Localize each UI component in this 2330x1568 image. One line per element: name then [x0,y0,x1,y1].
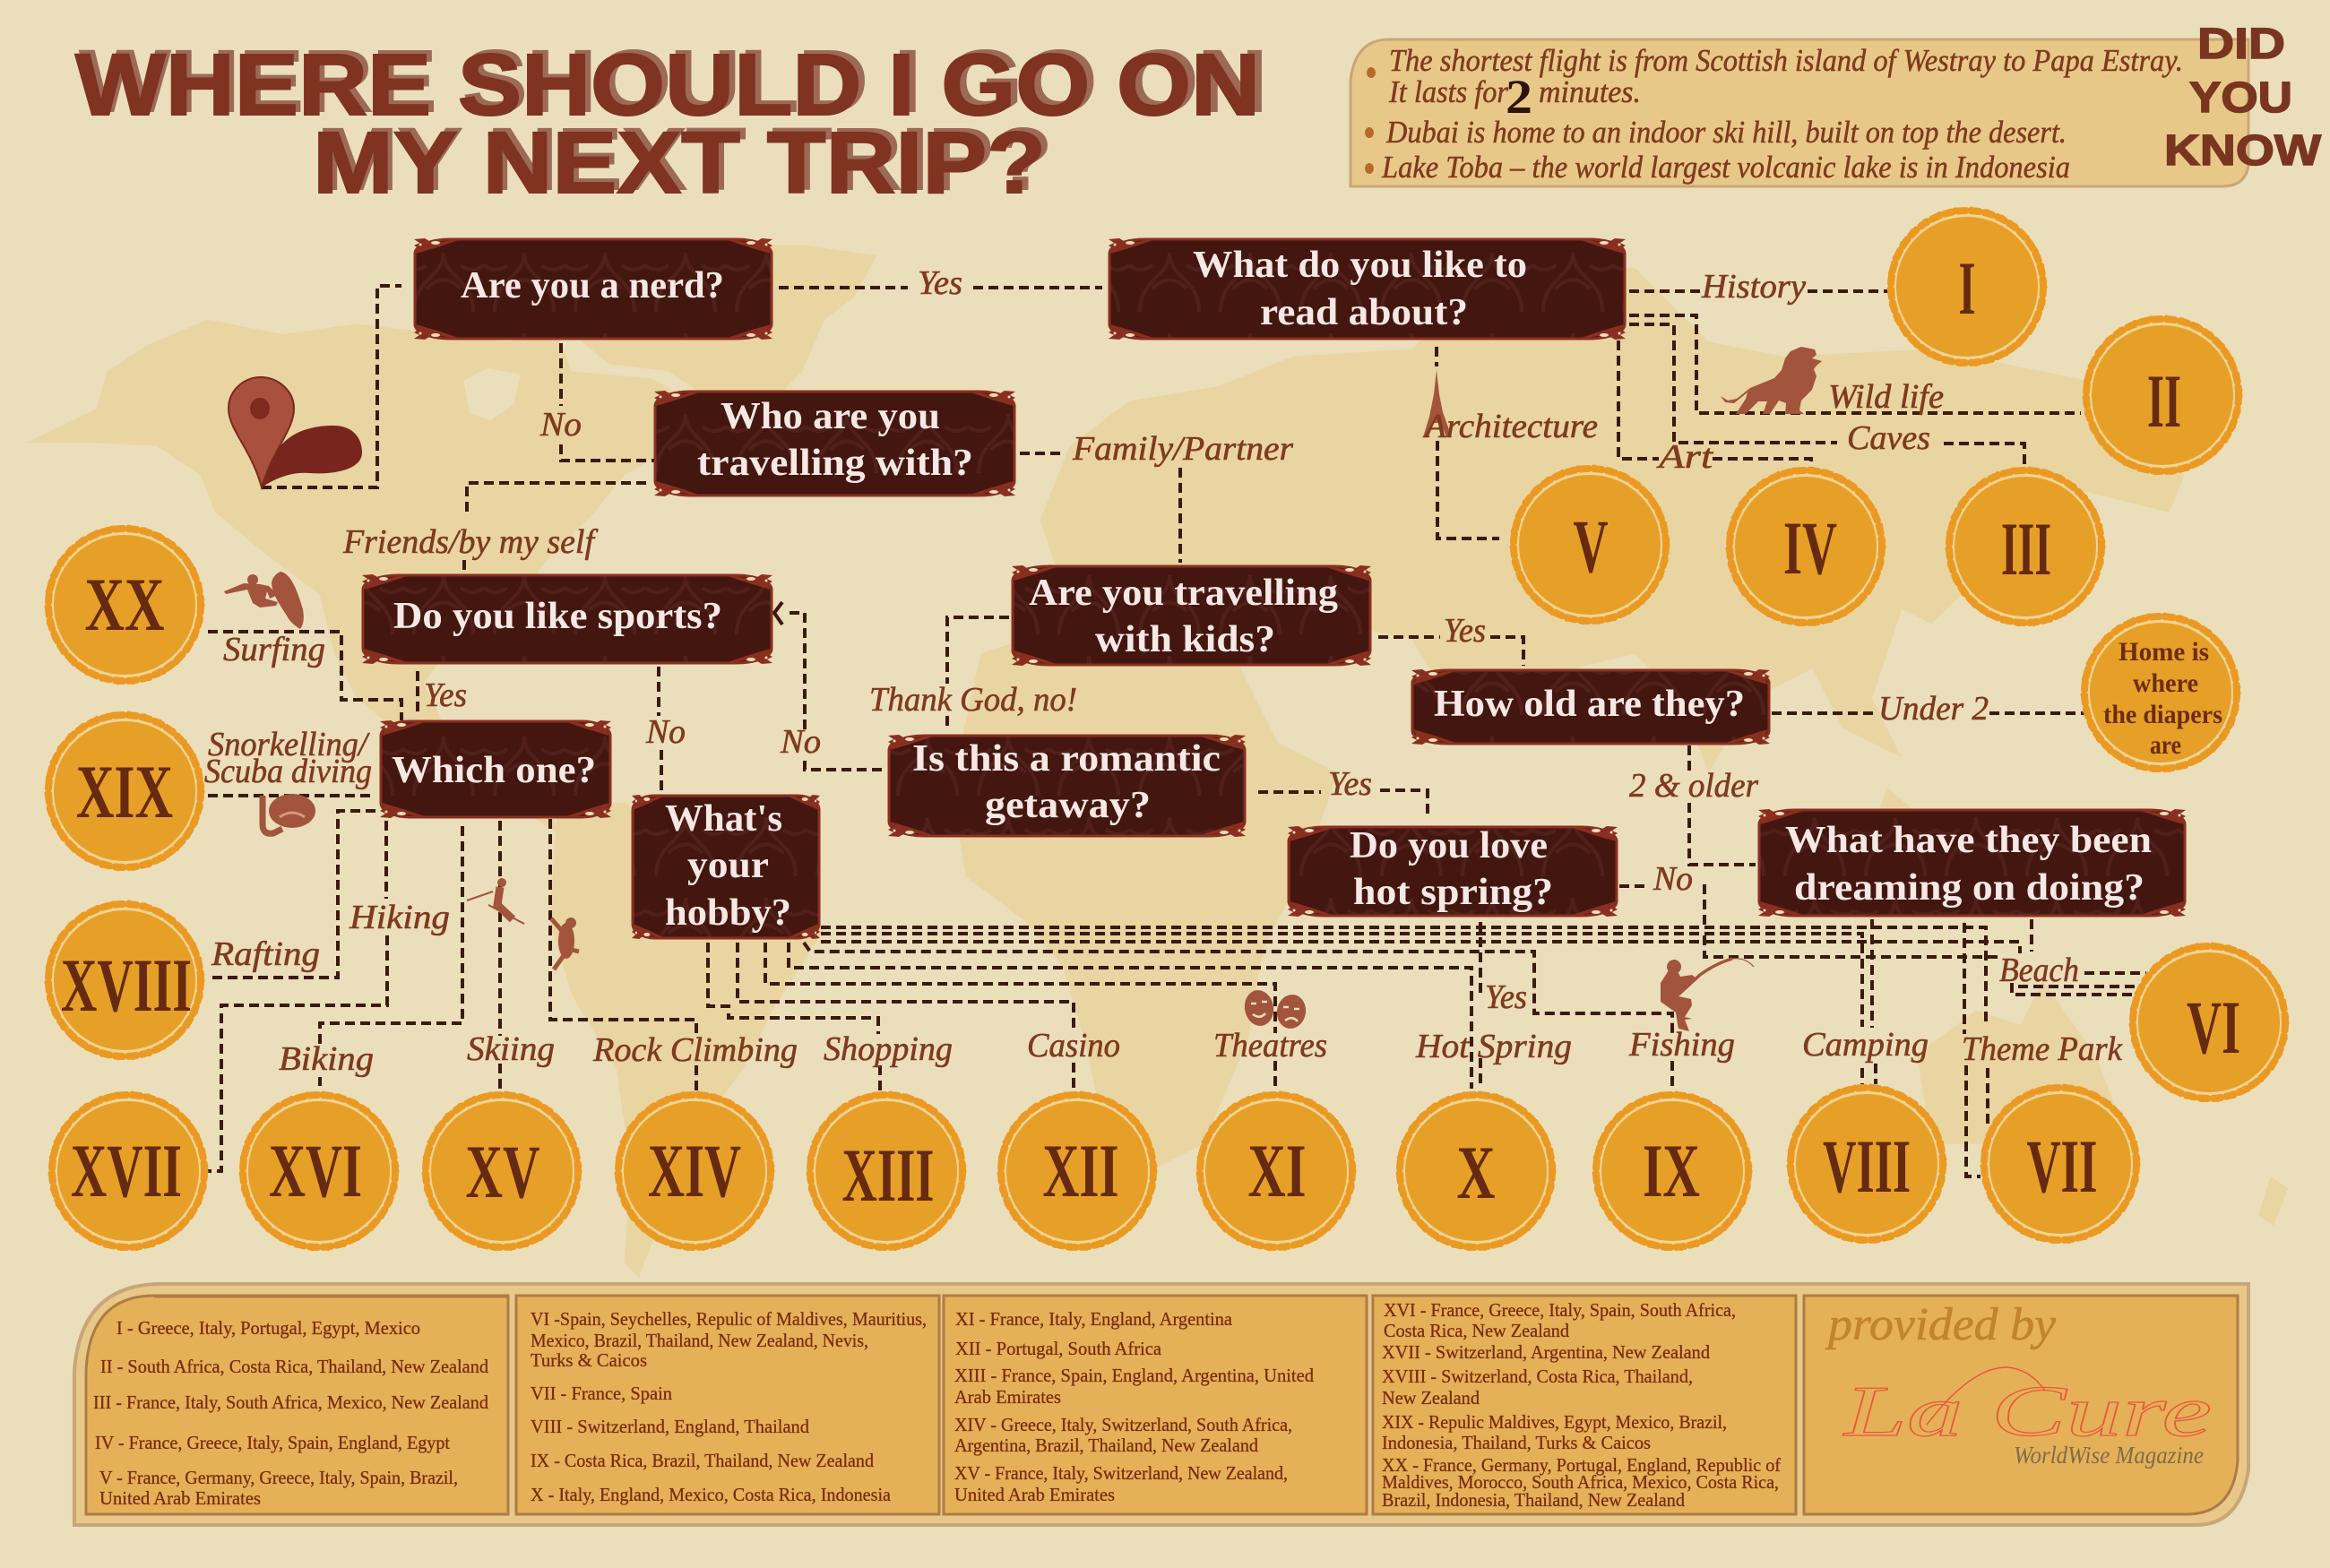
legend column: XI to XV: United Arab Emirates [954,1484,1115,1505]
icon: fisherman [1661,959,1754,1031]
connector: kids yes [1378,637,1523,666]
connector: under 2 [1772,711,2086,715]
legend column: I to V [86,1296,508,1514]
medallion: home is where the diapers are: are [2150,730,2181,760]
question box: are you a nerd [414,238,772,340]
world map [27,246,2288,1278]
branch labels: Family/Partner [1072,430,1293,468]
medallion: XX: XX [84,563,165,647]
question box: what's your hobby: What's [665,798,782,840]
medallion: V [1512,467,1668,623]
icon: surfer [224,572,304,629]
connector: art [1618,340,1811,468]
connector: nerd yes [779,286,1102,289]
connector: kids no [947,617,1009,726]
legend column: XI to XV: XI - France, Italy, England, Argentina [955,1308,1233,1330]
question box: which one [380,720,611,818]
medallion: VIII: VIII [1823,1124,1911,1209]
connector: camping from hobby [821,934,1862,1084]
branch labels: Fishing [1628,1026,1735,1064]
legend column: XI to XV: Arab Emirates [954,1386,1061,1408]
medallion: II [2084,317,2240,473]
medallion: VI: VI [2187,986,2240,1070]
question box: what's your hobby [632,795,820,939]
heading: did you know: KNOW [2164,127,2322,175]
panel: did you know facts: 2 [1506,70,1532,124]
connector: family [1020,453,1180,563]
legend column: XVI to XX: Costa Rica, New Zealand [1384,1320,1569,1341]
panel: provided by credit [1804,1296,2238,1514]
medallion: V: V [1574,504,1608,589]
question box: what's your hobby: your [687,845,769,886]
heading: did you know: YOU [2189,74,2292,122]
medallion: XV [424,1093,580,1249]
branch labels: Beach [1999,952,2079,989]
branch labels: No [1653,860,1693,898]
branch labels: Rafting [211,935,320,973]
medallion: XV: XV [466,1130,539,1214]
branch labels: Scuba diving [204,753,372,790]
medallion: XIII: XIII [842,1133,934,1218]
legend column: XI to XV: XV - France, Italy, Switzerland, New Zealand, [954,1462,1288,1484]
legend column: VI to X [516,1296,939,1514]
medallion: III [1947,469,2103,625]
medallion: I: I [1959,246,1975,331]
medallion: home is where the diapers are: where [2133,668,2198,698]
connector: history [1629,289,1894,293]
legend column: I to V: IV - France, Greece, Italy, Spain, England, Egypt [95,1432,450,1453]
legend column: XVI to XX: Maldives, Morocco, South Africa, Mexico, Costa Rica, [1382,1471,1779,1493]
branch labels: Skiing [467,1030,555,1068]
question box: do you love hot spring: Do you love [1350,825,1548,866]
question box: do you love hot spring [1288,825,1618,917]
branch labels: Shopping [824,1030,953,1068]
medallion: XVI: XVI [269,1129,362,1213]
connector: start to nerd [262,286,401,487]
panel: did you know facts: It lasts for [1388,74,1508,109]
connector: fishing [804,943,1672,1089]
medallion: XX [47,527,203,683]
branch labels: Theatres [1213,1027,1327,1064]
legend column: XVI to XX: XVI - France, Greece, Italy, Spain, South Africa, [1384,1299,1736,1321]
panel: did you know facts: Dubai is home to an indoor ski hill, built on top the desert. [1385,115,2067,150]
medallion: IV: IV [1783,506,1837,590]
icon: map pin [229,377,362,487]
branch labels: Caves [1847,419,1930,457]
branch labels: No [780,723,821,761]
medallion: VIII [1789,1086,1945,1242]
branch labels: 2 & older [1629,767,1758,805]
medallion: XVIII [47,902,203,1058]
question box: do you like sports [362,574,772,664]
question box: which one: Which one? [392,750,596,791]
legend column: XVI to XX: XVIII - Switzerland, Costa Rica, Thailand, [1382,1366,1693,1387]
panel: did you know facts: Lake Toba – the world largest volcanic lake is in Indonesia [1381,150,2070,185]
title: MY NEXT TRIP? [313,114,1046,211]
connector: hiking [206,821,387,1171]
question box: are you travelling with kids [1012,565,1371,666]
connector: beach from hobby [821,942,2020,953]
branch labels: Theme Park [1962,1030,2123,1068]
branch labels [204,264,2123,1078]
panel: provided by credit: La Cure [1842,1373,2212,1452]
panel: did you know facts [1351,39,2248,186]
medallion: XI [1198,1093,1354,1249]
branch labels: Art [1655,438,1714,476]
branch labels: Yes [1444,612,1486,650]
connector: surfing [208,632,401,720]
connector: spring no stub [1619,884,1648,888]
connector: architecture [1437,347,1499,538]
branch labels: Camping [1802,1026,1929,1064]
medallion: IV [1728,469,1884,625]
medallion: home is where the diapers are [2083,615,2239,771]
legend column: XI to XV [944,1296,1367,1514]
medallion: XIII [808,1093,964,1249]
heading: did you know [2164,21,2322,175]
medallion: X: X [1457,1131,1495,1215]
medallion: VI [2131,944,2287,1100]
branch labels: Snorkelling/ [208,726,370,763]
legend column: VI to X: VI -Spain, Seychelles, Repulic of Maldives, Mauritius, [531,1308,927,1330]
branch labels: Surfing [223,631,325,668]
icon: lion [1721,347,1822,414]
medallion: XVI [241,1093,397,1249]
branch labels: Wild life [1828,378,1944,416]
connector: two and older [1689,745,1756,865]
legend column: XVI to XX: XIX - Repulic Maldives, Egypt, Mexico, Brazil, [1382,1411,1727,1433]
branch labels: Yes [1328,765,1372,803]
medallion: IX: IX [1643,1129,1700,1213]
medallion: VII: VII [2027,1124,2097,1209]
branch labels: Under 2 [1878,690,1989,728]
question box: what have they been dreaming on doing [1758,809,2186,917]
question box: are you a nerd: Are you a nerd? [461,265,724,306]
question box: what do you like to read about: What do you like to [1193,245,1527,286]
question box: who are you travelling with [654,391,1015,496]
icon: eiffel tower [1423,370,1452,437]
medallion: XIX: XIX [76,750,173,834]
branch labels: Thank God, no! [869,681,1077,719]
panel: provided by credit: WorldWise Magazine [2014,1442,2204,1469]
question box: what have they been dreaming on doing: dreaming on doing? [1794,867,2144,909]
legend column: XI to XV: XII - Portugal, South Africa [955,1338,1162,1359]
medallion: XII: XII [1043,1129,1118,1213]
legend column: XVI to XX: XVII - Switzerland, Argentina, New Zealand [1382,1341,1710,1363]
question box: is this a romantic getaway: Is this a romantic [912,738,1221,780]
medallion: XIV [617,1093,772,1249]
legend column: VI to X: Mexico, Brazil, Thailand, New Zealand, Nevis, [531,1330,868,1351]
medallion: XIX [47,713,203,869]
question box: how old are they: How old are they? [1434,684,1745,725]
medallion: XVII: XVII [71,1129,182,1213]
branch labels: No [645,713,686,751]
branch labels: Friends/by my self [342,523,598,561]
medallion: IX [1594,1093,1750,1249]
connector: rafting [208,811,375,978]
legend column: XVI to XX: XX - France, Germany, Portugal, England, Republic of [1382,1454,1781,1476]
arrow: romantic no to sports [774,602,882,770]
legend column: I to V: III - France, Italy, South Africa, Mexico, New Zealand [93,1391,488,1413]
question box: what do you like to read about: read about? [1260,292,1468,333]
legend column: I to V: V - France, Germany, Greece, Italy, Spain, Brazil, [99,1467,458,1488]
question box: what do you like to read about [1109,238,1626,340]
connector: shopping [708,943,880,1090]
branch labels: Architecture [1422,408,1598,445]
question box: are you travelling with kids: Are you travelling [1029,573,1338,614]
medallion: XVII [50,1093,206,1249]
connector: theme park from dreaming [1964,923,1980,1176]
connector: hot spring yes [1479,922,1482,1089]
connector: hot spring from hobby [789,943,1471,1089]
question box: who are you travelling with: Who are you [721,396,940,437]
title: WHERE SHOULD I GO ON [75,36,1260,134]
panel: destinations legend background [74,1284,2248,1525]
medallion: XIV: XIV [648,1129,741,1213]
legend column: XVI to XX: Indonesia, Thailand, Turks & Caicos [1382,1432,1651,1453]
legend column: VI to X: VII - France, Spain [531,1383,672,1404]
legend column: XVI to XX: Brazil, Indonesia, Thailand, New Zealand [1382,1489,1685,1511]
icon: theatre masks [1242,988,1308,1030]
medallion: home is where the diapers are: Home is [2119,637,2209,667]
question box: do you like sports: Do you like sports? [393,596,722,637]
connector: biking [320,826,462,1086]
branch labels: Hiking [349,899,450,936]
medallion: VII [1982,1086,2138,1242]
branch labels: Hot Spring [1415,1028,1572,1065]
legend column: XI to XV: XIV - Greece, Italy, Switzerland, South Africa, [954,1414,1292,1435]
branch labels: History [1701,268,1806,306]
connector: caves [1629,324,2024,468]
legend column: VI to X: IX - Costa Rica, Brazil, Thailand, New Zealand [531,1450,874,1471]
connector: skiing [498,821,502,1090]
medallion: XI: XI [1247,1129,1307,1213]
connector: hot spring no [1704,884,1998,957]
medallion: II: II [2147,359,2181,444]
medallion: X [1398,1093,1554,1249]
connector: camping from dreaming [1872,919,1876,1084]
legend column: VI to X: Turks & Caicos [531,1349,647,1371]
panel: did you know facts: The shortest flight is from Scottish island of Westray to Papa Estray. [1389,43,2183,78]
connector: beach from dreaming [2030,919,2033,952]
medallion: XVIII: XVIII [61,943,192,1028]
question box: are you travelling with kids: with kids? [1095,619,1275,660]
icon: climber [551,918,579,969]
connector: romantic yes [1258,790,1428,817]
question box: what's your hobby: hobby? [665,892,791,934]
question box: what have they been dreaming on doing: What have they been [1785,820,2152,861]
heading: did you know: DID [2197,21,2285,68]
medallion: XII [999,1093,1155,1249]
medallion: home is where the diapers are: the diapers [2103,700,2222,729]
legend column: I to V: I - Greece, Italy, Portugal, Egypt, Mexico [116,1317,420,1339]
legend column: XVI to XX: New Zealand [1382,1387,1480,1409]
branch labels: No [539,406,582,444]
title: MY NEXT TRIP? [317,110,1052,208]
connector: casino [738,943,1074,1090]
panel: provided by credit: provided by [1825,1299,2057,1350]
connector: theme park from hobby [821,927,1988,1127]
question box: do you love hot spring: hot spring? [1353,872,1553,913]
connector: theatres [765,943,1275,1090]
icon: skier [467,878,524,924]
legend column: VI to X: X - Italy, England, Mexico, Costa Rica, Indonesia [531,1484,892,1505]
medallion: I [1889,209,2045,365]
legend column: I to V: United Arab Emirates [99,1487,261,1509]
connector: friends [464,483,646,571]
branch labels: Yes [918,264,962,302]
connector: rock climbing [550,819,696,1090]
connector: nerd no [561,343,654,461]
branch labels: Rock Climbing [592,1031,798,1069]
icon: snorkel mask [263,794,315,833]
title [75,32,1267,211]
connector: sports no [659,667,661,791]
question box: is this a romantic getaway: getaway? [985,785,1151,826]
legend column: VI to X: VIII - Switzerland, England, Thailand [531,1416,809,1437]
branch labels: Casino [1027,1027,1120,1064]
question box: who are you travelling with: travelling with? [697,443,973,484]
panel: did you know facts: minutes. [1539,74,1641,109]
connector: wild life [1629,315,2081,413]
branch labels: Yes [424,676,467,714]
legend column: I to V: II - South Africa, Costa Rica, Thailand, New Zealand [100,1356,488,1377]
legend column: XVI to XX [1373,1296,1796,1514]
legend column: XI to XV: Argentina, Brazil, Thailand, New Zealand [954,1434,1258,1456]
title: WHERE SHOULD I GO ON [80,32,1267,130]
branch labels: Biking [279,1040,374,1078]
medallion: III: III [2001,507,2051,591]
legend column: XI to XV: XIII - France, Spain, England, Argentina, United [954,1365,1314,1386]
question box: is this a romantic getaway [888,735,1246,837]
connector: snorkelling [208,794,374,797]
connector: beach to VI [2012,973,2146,995]
connector: sports yes [416,671,419,715]
branch labels: Yes [1485,978,1527,1016]
question box: how old are they [1411,669,1770,745]
